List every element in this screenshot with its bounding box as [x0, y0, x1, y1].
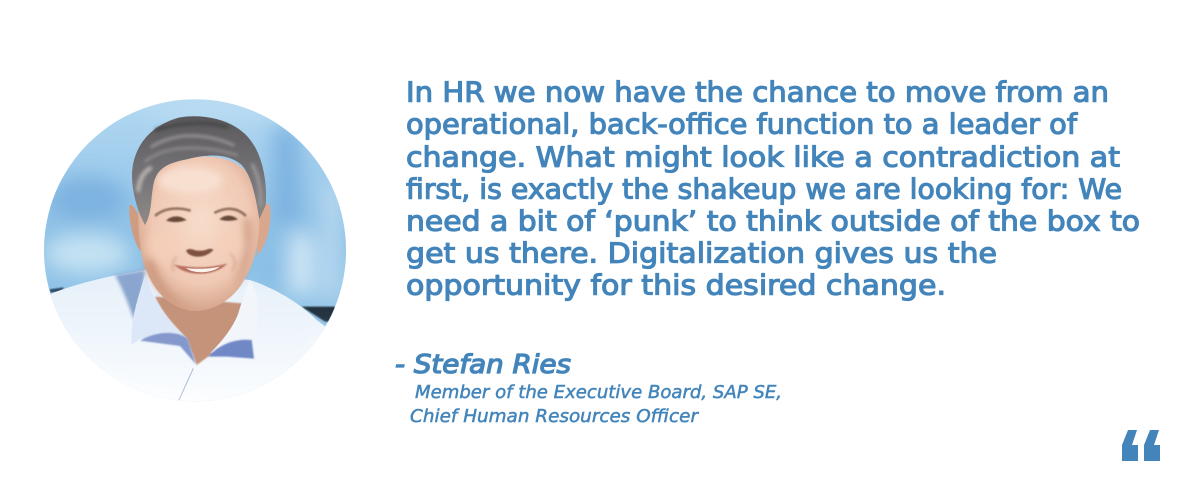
eyes	[166, 216, 187, 222]
face shading	[145, 167, 252, 308]
name: - Stefan Ries	[395, 350, 571, 380]
quote text: operational, back-office function to a leader of	[406, 108, 1078, 140]
ears	[129, 204, 142, 252]
quote text: get us there. Digitalization gives us the	[406, 236, 997, 270]
hair	[132, 116, 266, 225]
quote text: opportunity for this desired change.	[406, 268, 946, 302]
neck	[155, 297, 243, 365]
smile lines	[172, 253, 235, 272]
right collar	[210, 281, 258, 353]
quote text: In HR we now have the chance to move from an	[406, 76, 1109, 108]
quote text	[406, 76, 1140, 302]
shirt	[50, 270, 330, 410]
eyebrows	[155, 209, 191, 216]
blurred city background	[40, 93, 350, 407]
attribution	[395, 350, 782, 427]
face	[138, 157, 259, 311]
role line 1: Member of the Executive Board, SAP SE,	[415, 383, 782, 403]
quote text: need a bit of ‘punk’ to think outside of the box to	[406, 204, 1140, 238]
white fade at bottom of shirt	[43, 323, 350, 410]
quote text: first, is exactly the shakeup we are looking for: We	[406, 172, 1122, 206]
mouth	[174, 263, 227, 274]
role line 2: Chief Human Resources Officer	[410, 407, 700, 427]
quote text: change. What might look like a contradiction at	[406, 140, 1120, 174]
shirt shadow left shoulder	[115, 270, 145, 320]
nose	[186, 249, 213, 257]
icon: quotation mark	[1122, 430, 1160, 461]
dark window ledge	[302, 307, 335, 322]
left collar	[131, 275, 195, 362]
placket	[179, 368, 193, 400]
hair highlights	[138, 123, 261, 205]
portrait photo: Stefan Ries	[40, 93, 350, 410]
